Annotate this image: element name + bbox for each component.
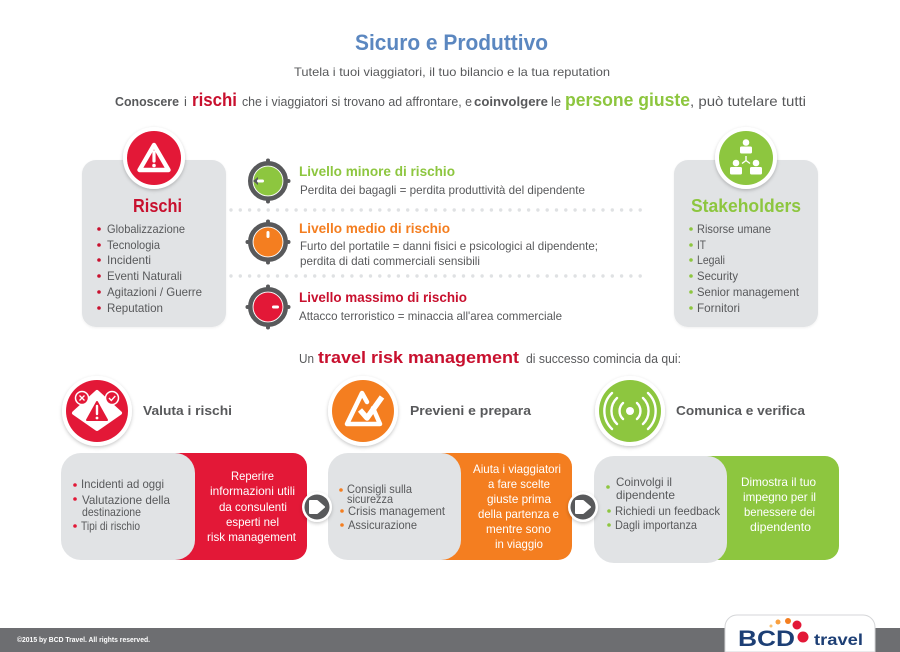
- stakeholder list: Risorse umane: [697, 222, 771, 236]
- call to action: [207, 469, 297, 544]
- bullet list: [339, 482, 446, 532]
- risk level: minor: [299, 163, 585, 197]
- panel: stakeholders: Stakeholders: [691, 196, 801, 216]
- bullet list: sicurezza: [347, 492, 393, 506]
- step 1: valuta i rischi: [61, 376, 307, 560]
- bullet list: Assicurazione: [348, 518, 417, 532]
- stakeholder list: IT: [697, 238, 707, 252]
- stakeholder list: Legali: [697, 253, 725, 267]
- gauge: low risk: [250, 158, 290, 204]
- bullet list: Coinvolgi il: [616, 475, 672, 489]
- title: Sicuro e Produttivo: [355, 30, 548, 55]
- panel: rischi: [82, 127, 226, 327]
- panel: stakeholders: [674, 127, 818, 327]
- intro sentence: le: [551, 94, 561, 109]
- risk list: [97, 222, 202, 315]
- call to action: in viaggio: [495, 537, 543, 551]
- risk list: Incidenti: [107, 253, 151, 267]
- call to action: esperti nel: [226, 515, 279, 529]
- risk level: medium: Furto del portatile = danni fisici e psicologici al dipendente;: [300, 239, 598, 253]
- icon: broadcast signal: [595, 376, 665, 446]
- intro sentence: i: [184, 94, 187, 109]
- subtitle: Tutela i tuoi viaggiatori, il tuo bilancio e la tua reputation: [294, 65, 610, 79]
- dotted dividers: [231, 210, 643, 276]
- bullet list: Crisis management: [348, 504, 446, 518]
- intro sentence: [115, 90, 806, 110]
- step 3: comunica e verifica: Comunica e verifica: [676, 403, 806, 418]
- step 1: valuta i rischi: Valuta i rischi: [143, 403, 232, 418]
- call to action: impegno per il: [743, 490, 816, 504]
- intro sentence: coinvolgere: [474, 94, 548, 109]
- section heading: Un: [299, 351, 314, 366]
- risk level: medium: Livello medio di rischio: [299, 220, 450, 236]
- card: valuta: [61, 453, 307, 560]
- intro sentence: rischi: [192, 90, 237, 110]
- bullet list: [73, 477, 170, 533]
- risk list: Agitazioni / Guerre: [107, 285, 202, 299]
- step 3: comunica e verifica: [594, 376, 839, 563]
- bullet list: Consigli sulla: [347, 482, 412, 496]
- call to action: giuste prima: [487, 492, 551, 506]
- call to action: Aiuta i viaggiatori: [473, 462, 561, 476]
- card: previeni: [328, 453, 572, 560]
- bullet list: Dagli importanza: [615, 518, 697, 532]
- gauge: high risk: [246, 284, 290, 330]
- call to action: [741, 475, 816, 534]
- risk list: Reputation: [107, 301, 163, 315]
- intro sentence: che i viaggiatori si trovano ad affrontare, e: [242, 94, 472, 109]
- call to action: da consulenti: [219, 500, 287, 514]
- risk level: minor: Perdita dei bagagli = perdita produttività del dipendente: [300, 183, 585, 197]
- icon: people network: [715, 127, 777, 189]
- footer bar: [0, 628, 900, 652]
- icon: warning triangle: [123, 127, 185, 189]
- call to action: Reperire: [231, 469, 274, 483]
- card: comunica: [594, 456, 839, 563]
- call to action: Dimostra il tuo: [741, 475, 816, 489]
- logo: BCD travel: [725, 615, 875, 652]
- step 2: previeni e prepara: [328, 376, 572, 560]
- logo: BCD travel: travel: [814, 632, 863, 649]
- call to action: mentre sono: [486, 522, 551, 536]
- call to action: a fare scelte: [488, 477, 550, 491]
- risk level: medium: [299, 220, 598, 268]
- risk level: maximum: Livello massimo di rischio: [299, 289, 467, 305]
- intro sentence: Conoscere: [115, 94, 179, 109]
- risk list: Eventi Naturali: [107, 269, 182, 283]
- step 2: previeni e prepara: Previeni e prepara: [410, 403, 532, 418]
- icon: diamond warning: [62, 376, 132, 446]
- gauge: medium risk: [246, 220, 290, 264]
- risk level: medium: perdita di dati commerciali sensibili: [300, 254, 480, 268]
- risk level: minor: Livello minore di rischio: [299, 163, 455, 179]
- call to action: della partenza e: [478, 507, 559, 521]
- logo: BCD travel: BCD: [738, 626, 795, 651]
- stakeholder list: Fornitori: [697, 301, 740, 315]
- risk level: maximum: [299, 289, 562, 323]
- section heading: di successo comincia da qui:: [526, 351, 681, 366]
- call to action: risk management: [207, 530, 297, 544]
- intro sentence: persone giuste: [565, 90, 690, 110]
- panel: rischi: Rischi: [133, 196, 182, 216]
- stakeholder list: [689, 222, 800, 315]
- bullet list: destinazione: [82, 505, 141, 519]
- stakeholder list: Security: [697, 269, 738, 283]
- call to action: [473, 462, 561, 551]
- stakeholder list: Senior management: [697, 285, 800, 299]
- call to action: benessere dei: [744, 505, 815, 519]
- footer bar: ©2015 by BCD Travel. All rights reserved.: [17, 636, 150, 644]
- bullet list: Richiedi un feedback: [615, 504, 721, 518]
- icon: triangle check: [328, 376, 398, 446]
- risk list: Tecnologia: [107, 238, 160, 252]
- bullet list: [606, 475, 721, 532]
- bullet list: Tipi di rischio: [81, 519, 140, 533]
- arrow: step 1 to 2: [302, 492, 332, 522]
- risk list: Globalizzazione: [107, 222, 185, 236]
- section heading: [299, 348, 681, 367]
- bullet list: Valutazione della: [82, 493, 170, 507]
- bullet list: Incidenti ad oggi: [81, 477, 164, 491]
- section heading: travel risk management: [318, 348, 519, 367]
- arrow: step 2 to 3: [568, 492, 598, 522]
- bullet list: dipendente: [616, 488, 675, 502]
- call to action: dipendento: [750, 520, 811, 534]
- intro sentence: , può tutelare tutti: [690, 93, 806, 109]
- call to action: informazioni utili: [210, 484, 295, 498]
- risk level: maximum: Attacco terroristico = minaccia all'area commerciale: [299, 309, 562, 323]
